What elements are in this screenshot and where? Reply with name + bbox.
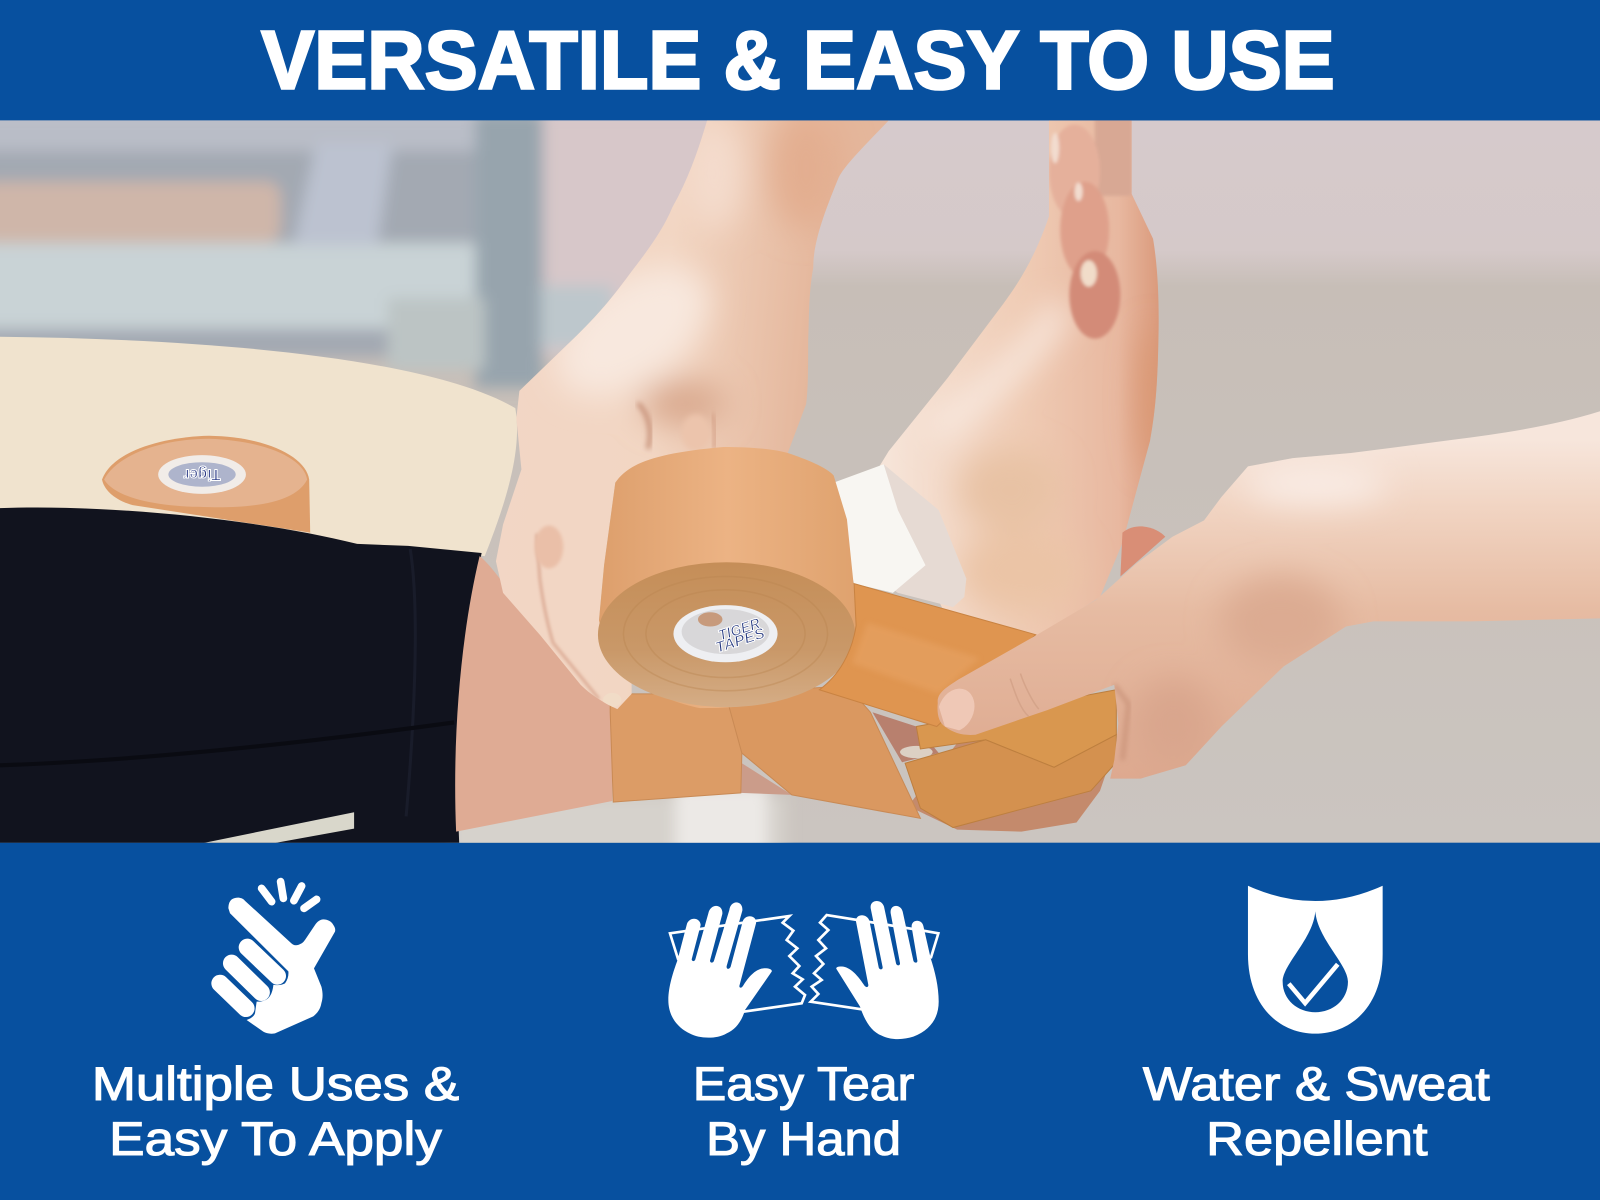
label: easy tear [693,1058,914,1165]
blurred room background [0,112,786,857]
icon: snapping fingers [220,882,335,1034]
label: water and sweat: Repellent [1206,1113,1428,1165]
leggings [0,507,482,843]
upper hand holding the roll [496,107,889,709]
column: multiple uses [92,882,459,1165]
large tape roll: TAPES [713,625,768,657]
label: multiple uses: Multiple Uses & [92,1058,459,1110]
footer band [0,843,1600,1200]
large tape roll: TIGER [716,615,762,645]
strip of tape from roll to heel [819,584,1036,727]
small tape roll on table [102,436,310,533]
lower leg skin [455,556,612,832]
table top [0,337,517,556]
label: water and sweat [1143,1058,1490,1165]
icon: shield with water drop [1248,886,1383,1034]
label: multiple uses [92,1058,459,1165]
supporting hand on the right [931,411,1600,779]
header band [0,0,1600,120]
small tape roll on table: Tiger [183,465,221,482]
label: easy tear: Easy Tear [693,1058,914,1110]
label: easy tear: By Hand [706,1113,901,1165]
large tape roll [598,447,856,708]
icon: hands tearing tape [668,901,939,1039]
label: multiple uses: Easy To Apply [109,1113,442,1165]
label: water and sweat: Water & Sweat [1143,1058,1490,1110]
tape wrapped around ankle and heel [610,686,1116,832]
white pad on the heel [834,464,966,607]
foot sole and toes [878,112,1165,638]
column: easy tear [668,901,939,1165]
photo: tape being applied to a foot [0,107,1600,857]
column: water and sweat [1143,886,1490,1165]
title: VERSATILE & EASY TO USE [261,13,1335,106]
